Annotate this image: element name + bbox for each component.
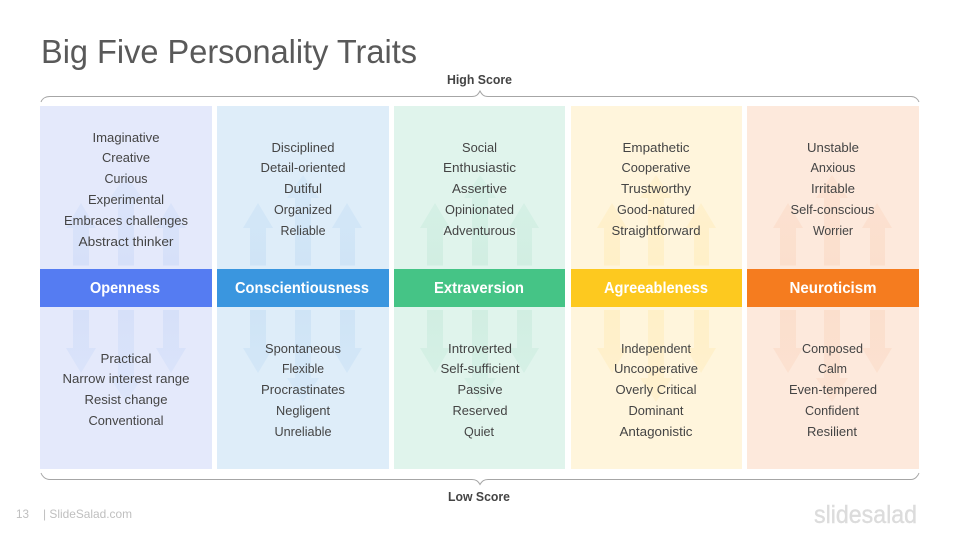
high score traits: openness: Experimental	[88, 192, 164, 207]
low score traits: agreeableness: Dominant	[628, 403, 684, 418]
high score traits: neuroticism: Anxious	[810, 160, 856, 175]
low score traits: extraversion: Self-sufficient	[440, 361, 520, 376]
panel: conscientiousness	[217, 106, 389, 469]
high score traits: extraversion: Adventurous	[444, 223, 516, 238]
high score bracket	[41, 91, 919, 102]
low score traits: agreeableness: Independent	[621, 341, 691, 356]
low score label: Low Score	[448, 490, 510, 504]
arrows: extraversion high	[420, 175, 539, 266]
low score traits: neuroticism: Confident	[805, 403, 859, 418]
low score traits: neuroticism: Even-tempered	[789, 382, 877, 397]
title: Big Five Personality Traits	[41, 33, 417, 70]
high score traits: openness: Embraces challenges	[64, 213, 188, 228]
low score traits: extraversion	[440, 341, 520, 439]
arrows: neuroticism high	[773, 175, 892, 266]
header bar: extraversion	[394, 269, 565, 307]
low score traits: neuroticism: Resilient	[807, 424, 857, 439]
high score traits: agreeableness: Trustworthy	[621, 181, 692, 196]
high score traits: extraversion: Assertive	[452, 181, 507, 196]
low score traits: neuroticism: Composed	[802, 341, 863, 356]
low score traits: agreeableness: Antagonistic	[620, 424, 693, 439]
header bar: conscientiousness	[217, 269, 389, 307]
low score traits: conscientiousness: Procrastinates	[261, 382, 346, 397]
low score traits: conscientiousness: Flexible	[282, 361, 324, 376]
low score traits: conscientiousness: Unreliable	[274, 424, 332, 439]
header bar: openness	[40, 269, 212, 307]
low score traits: openness	[62, 351, 190, 428]
page number: 13	[16, 507, 29, 521]
low score traits: conscientiousness: Spontaneous	[265, 341, 341, 356]
arrows: agreeableness low	[597, 310, 716, 402]
high score traits: agreeableness: Straightforward	[612, 223, 700, 238]
high score traits: neuroticism: Worrier	[813, 223, 854, 238]
high score traits: openness: Imaginative	[92, 130, 160, 145]
low score traits: extraversion: Reserved	[452, 403, 508, 418]
header bar: agreeableness: Agreeableness	[604, 280, 708, 297]
low score traits: openness: Practical	[100, 351, 152, 366]
high score traits: neuroticism: Self-conscious	[790, 202, 875, 217]
header bar: agreeableness	[571, 269, 742, 307]
header bar: conscientiousness: Conscientiousness	[235, 280, 369, 297]
low score traits: openness: Resist change	[84, 392, 168, 407]
high score traits: extraversion: Enthusiastic	[443, 160, 517, 175]
high score traits: conscientiousness: Dutiful	[284, 181, 322, 196]
panel: neuroticism	[747, 106, 919, 469]
low score traits: openness: Narrow interest range	[62, 371, 190, 386]
high score traits: conscientiousness: Detail-oriented	[260, 160, 346, 175]
low score traits: agreeableness	[614, 341, 698, 439]
high score traits: openness: Curious	[104, 171, 148, 186]
header bar: neuroticism: Neuroticism	[790, 280, 876, 297]
footer source: | SlideSalad.com	[43, 507, 132, 521]
low score traits: agreeableness: Overly Critical	[616, 382, 697, 397]
arrows: neuroticism low	[773, 310, 892, 402]
panel: openness	[40, 106, 212, 469]
high score traits: conscientiousness	[260, 140, 346, 238]
high score traits: openness: Abstract thinker	[78, 234, 174, 249]
high score traits: agreeableness: Good-natured	[617, 202, 695, 217]
low score traits: conscientiousness	[261, 341, 346, 439]
high score label: High Score	[447, 73, 512, 87]
high score traits: conscientiousness: Organized	[274, 202, 332, 217]
arrows: extraversion low	[420, 310, 539, 402]
high score traits: agreeableness: Empathetic	[622, 140, 690, 155]
high score traits: neuroticism	[790, 140, 875, 238]
low score traits: agreeableness: Uncooperative	[614, 361, 698, 376]
arrows: conscientiousness high	[243, 175, 362, 266]
low score traits: extraversion: Quiet	[464, 424, 494, 439]
low score traits: neuroticism: Calm	[818, 361, 847, 376]
high score traits: openness	[64, 130, 188, 249]
low score traits: extraversion: Passive	[458, 382, 502, 397]
low score traits: conscientiousness: Negligent	[276, 403, 330, 418]
low score traits: extraversion: Introverted	[448, 341, 512, 356]
header bar: neuroticism	[747, 269, 919, 307]
high score traits: neuroticism: Irritable	[811, 181, 855, 196]
high score traits: openness: Creative	[102, 150, 150, 165]
high score traits: agreeableness: Cooperative	[622, 160, 690, 175]
high score traits: conscientiousness: Reliable	[280, 223, 326, 238]
arrows: conscientiousness low	[243, 310, 362, 402]
high score traits: extraversion	[443, 140, 517, 238]
arrows: openness high	[66, 175, 186, 266]
arrows: openness low	[66, 310, 186, 402]
high score traits: extraversion: Opinionated	[445, 202, 514, 217]
low score traits: openness: Conventional	[88, 413, 164, 428]
high score traits: neuroticism: Unstable	[807, 140, 859, 155]
high score traits: conscientiousness: Disciplined	[272, 140, 334, 155]
low score traits: neuroticism	[789, 341, 877, 439]
arrows: agreeableness high	[597, 175, 716, 266]
panel: extraversion	[394, 106, 565, 469]
high score traits: extraversion: Social	[462, 140, 497, 155]
low score bracket	[41, 473, 919, 484]
header bar: openness: Openness	[90, 280, 160, 297]
logo wordmark: slidesalad	[814, 501, 917, 529]
header bar: extraversion: Extraversion	[434, 280, 524, 297]
panel: agreeableness	[571, 106, 742, 469]
high score traits: agreeableness	[612, 140, 700, 238]
